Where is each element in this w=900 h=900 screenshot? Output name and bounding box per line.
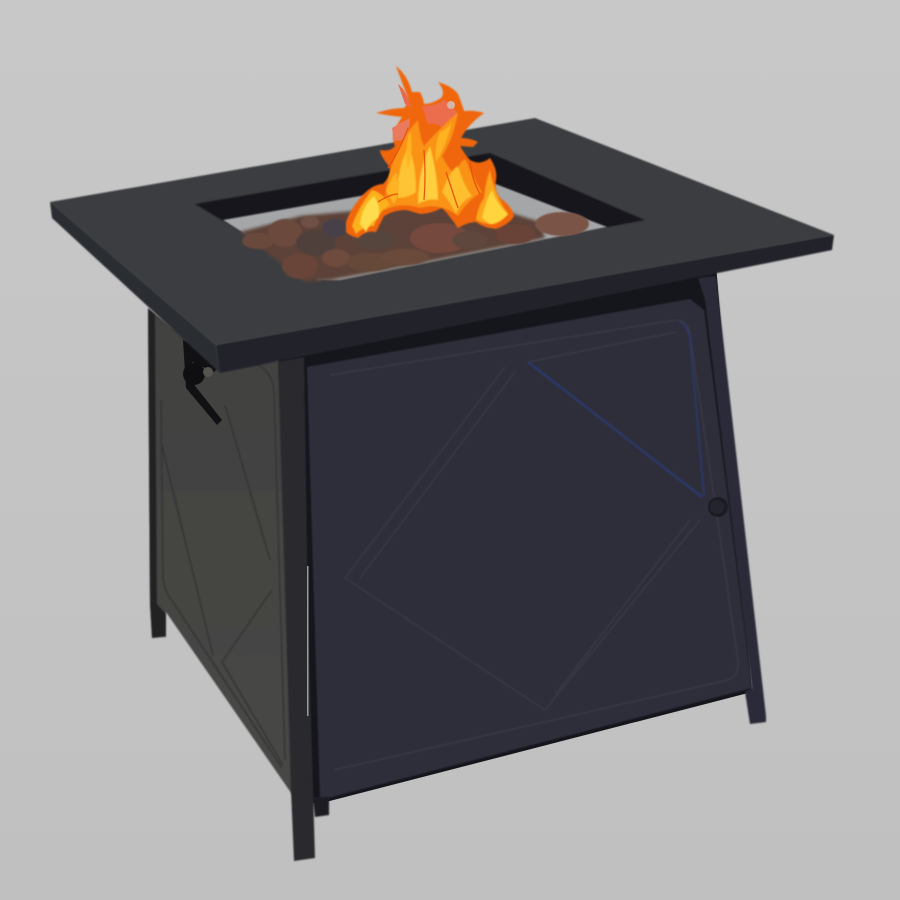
door knob bbox=[708, 497, 728, 517]
control knob and ignition bracket bbox=[183, 340, 222, 425]
front door bbox=[307, 299, 752, 800]
table top bbox=[50, 118, 834, 373]
lava rocks bbox=[242, 212, 589, 279]
body shadow behind door bbox=[278, 265, 752, 804]
front left post and leg bbox=[278, 357, 329, 861]
fire bowl opening bbox=[195, 153, 645, 282]
door gap highlight bbox=[307, 566, 308, 716]
left side panel with leg bbox=[148, 308, 296, 800]
right leg bbox=[698, 276, 766, 724]
flame bbox=[346, 66, 514, 238]
